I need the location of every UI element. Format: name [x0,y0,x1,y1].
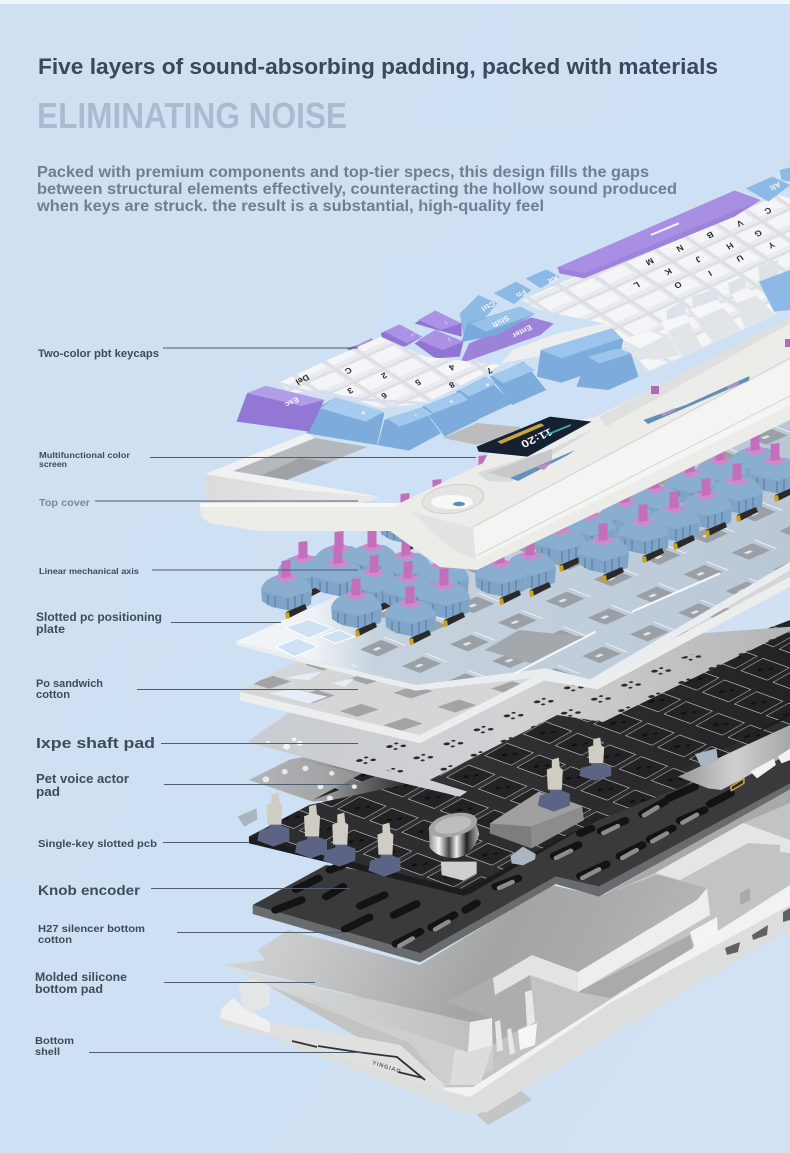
intro paragraph: when keys are struck. the result is a substantial, high-quality feel [36,198,544,215]
label: bottom shell [35,1035,362,1058]
top border strip [0,0,790,4]
intro paragraph: between structural elements effectively, counteracting the hollow sound produced [37,181,677,198]
label: h27 silencer bottom cotton: H27 silencer bottom [38,923,145,935]
layer: two-color pbt keycaps: 7 [484,366,494,376]
label: linear mechanical axis: Linear mechanical axis [39,566,139,576]
purple esc key [237,386,324,432]
label: pet voice actor pad [36,772,350,799]
label: single-key slotted pcb: Single-key slotted pcb [38,838,157,850]
label: multifunctional color screen: Multifunctional color [39,450,131,460]
stem tips [515,339,790,440]
label: po sandwich cotton: Po sandwich [36,678,103,690]
blue light strip [599,317,790,427]
left wing frame [205,433,380,504]
layer: two-color pbt keycaps: 4 [447,362,457,373]
layer: two-color pbt keycaps: 6 [379,391,389,401]
key legends: ← [372,344,384,355]
key legends [282,180,782,420]
layer: two-color pbt keycaps: 8 [447,380,457,390]
layer: two-color pbt keycaps: N [675,243,685,254]
layer: two-color pbt keycaps: U [734,253,745,264]
cover body [200,320,790,570]
layer: two-color pbt keycaps: Y [766,240,777,251]
label: multifunctional color screen: screen [39,459,67,469]
layer: two-color pbt keycaps: 5 [413,377,423,388]
key legends: + [358,408,368,418]
layer: two-color pbt keycaps: 2 [379,371,389,381]
layer: two-color pbt keycaps [237,167,790,457]
layer: two-color pbt keycaps: L [632,280,642,290]
heading: eliminating noise: ELIMINATING NOISE [37,95,347,136]
layer: two-color pbt keycaps: G [752,228,764,239]
screen recess [477,428,595,482]
intro paragraph: Packed with premium components and top-tier specs, this design fills the gaps [37,164,649,181]
layer: h27 silencer bottom cotton [253,710,790,962]
icon: usb-c port [731,778,744,791]
exposed switch housings [257,737,611,877]
blue shift [462,307,535,342]
key legends: ↑ [442,318,450,327]
icon: mic box [490,792,584,848]
label: h27 silencer bottom cotton [38,923,350,946]
blue keys row [306,328,639,451]
fins and posts [495,990,535,1055]
key legends: ↓ [446,336,454,345]
rail behind screen [443,423,520,445]
layer: two-color pbt keycaps: 3 [345,386,355,396]
label: knob encoder: Knob encoder [38,882,141,898]
label: bottom shell: shell [35,1046,60,1058]
layer: slotted pc positioning plate [236,363,790,691]
label: multifunctional color screen [39,450,476,469]
layer: two-color pbt keycaps: K [662,266,674,278]
icon: colour screen [477,417,591,457]
label: po sandwich cotton: cotton [36,689,70,701]
layer: two-color pbt keycaps: O [672,279,684,291]
icon: knob encoder [426,808,480,881]
translucent window [233,438,367,480]
label: slotted pc positioning plate [36,610,281,636]
label: two-color pbt keycaps: Two-color pbt keycaps [38,348,159,360]
label: pet voice actor pad: Pet voice actor [36,772,129,786]
label: pet voice actor pad: pad [36,785,60,799]
label: molded silicone bottom pad: Molded silicone [35,972,127,984]
label: molded silicone bottom pad [35,972,315,996]
layer: bottom shell [220,770,790,1125]
label: h27 silencer bottom cotton: cotton [38,934,72,946]
blue keys right [460,167,790,337]
icon: foot [477,1087,532,1125]
layer: two-color pbt keycaps: B [705,230,716,241]
key legends: Fn [514,288,528,300]
layer: two-color pbt keycaps: J [693,254,703,265]
row shadow fronts [667,260,778,323]
key legends: Enter [510,323,534,340]
slots [275,787,731,944]
key legends: Alt [546,273,560,286]
silicone sleeves [238,748,718,865]
layer: two-color pbt keycaps: C [763,205,774,216]
layer: top cover [200,317,790,570]
key legends: * [446,396,454,405]
purple spacebar [558,191,761,278]
purple arrow keys [346,311,463,364]
title: Five layers of sound-absorbing padding, packed with materials [38,54,718,79]
layer: ixpe shaft pad [247,627,790,797]
layer: two-color pbt keycaps: I [706,269,714,278]
icon: colour screen: 11:20 [518,426,555,450]
layer: bottom shell: YINGIAO [371,1060,402,1075]
key legends: Alt [768,180,782,192]
label: bottom shell: Bottom [35,1035,74,1047]
lower row keys [623,288,775,360]
label: molded silicone bottom pad: bottom pad [35,984,103,996]
label: slotted pc positioning plate: plate [36,622,65,636]
key legends: → [408,330,420,341]
key legends: - [412,411,419,420]
key legends: Esc [282,395,300,409]
key legends: Ctrl [480,299,497,313]
layer: two-color pbt keycaps: M [644,256,656,267]
layer: two-color pbt keycaps: C [343,365,354,376]
layer: po sandwich cotton [240,470,790,743]
icon: knob well [420,481,486,517]
rocker keys [750,748,790,778]
layer: two-color pbt keycaps: H [725,241,736,252]
ports [725,908,790,955]
layer: single-key slotted pcb [238,713,790,896]
purple enter [462,317,554,362]
exploded keyboard illustration [200,167,790,1125]
layer: pet voice actor pad [249,620,790,820]
label: ixpe shaft pad: Ixpe shaft pad [36,735,155,752]
silver port strip [678,725,790,790]
layer: molded silicone bottom pad [225,875,710,1052]
layer: two-color pbt keycaps: Del [294,373,311,387]
label: po sandwich cotton [36,678,358,701]
layer: two-color pbt keycaps: V [734,218,745,229]
intro paragraph [36,164,677,215]
label: slotted pc positioning plate: Slotted pc positioning [36,610,162,624]
white alpha block [522,193,790,372]
layer: linear mechanical switches [261,433,790,645]
logo stripe [292,1041,425,1080]
key legends: + [483,380,492,390]
white numpad [277,323,625,408]
key legends: Shift [490,314,511,329]
label: top cover: Top cover [39,497,90,509]
